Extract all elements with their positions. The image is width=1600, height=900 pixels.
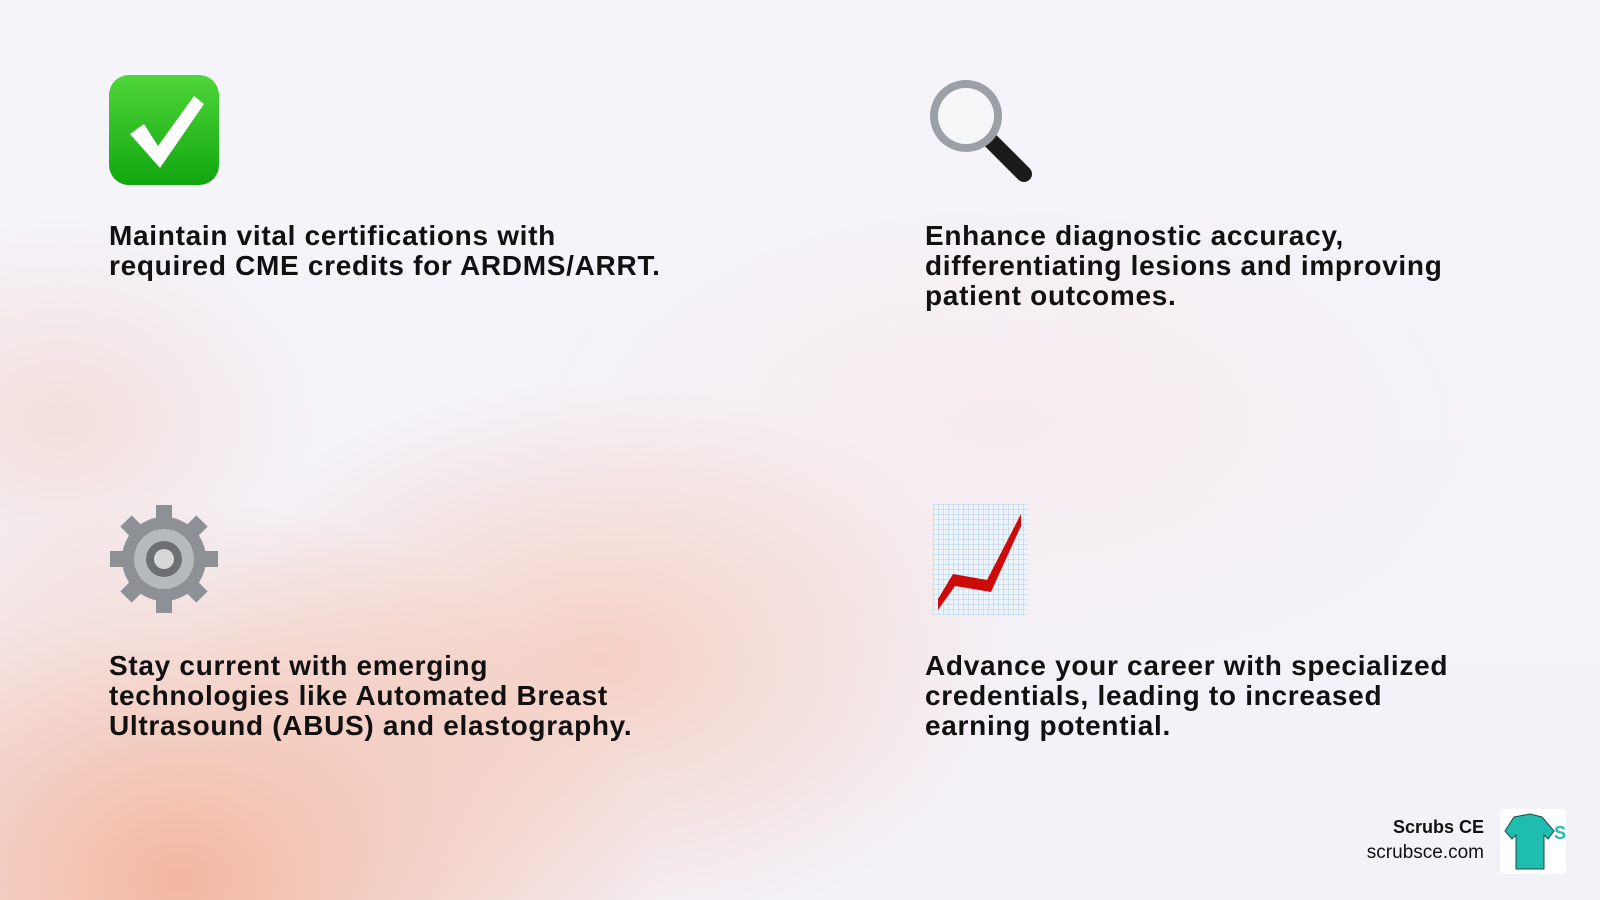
- text: technologies: Ultrasound (ABUS) and elastography.: [109, 710, 632, 741]
- text: certifications: required CME credits for ARDMS/ARRT.: [109, 250, 661, 281]
- text: diagnostic accuracy: differentiating lesions and improving: [925, 250, 1442, 281]
- text: technologies: Stay current with emerging: [109, 650, 488, 681]
- text: diagnostic accuracy: patient outcomes.: [925, 280, 1176, 311]
- text: certifications: Maintain vital certifications with: [109, 220, 556, 251]
- text: career: [925, 650, 1448, 741]
- icon: green checkmark: [109, 75, 219, 185]
- icon: gear: [110, 505, 218, 613]
- text: certifications: [109, 220, 661, 281]
- text: technologies: [109, 650, 632, 741]
- icon: chart increasing: [933, 504, 1028, 615]
- text: diagnostic accuracy: Enhance diagnostic accuracy,: [925, 220, 1344, 251]
- text: diagnostic accuracy: [925, 220, 1442, 311]
- text: technologies: technologies like Automated Breast: [109, 680, 608, 711]
- text: career: earning potential.: [925, 710, 1171, 741]
- logo: [1500, 809, 1566, 874]
- text: career: Advance your career with specialized: [925, 650, 1448, 681]
- brand: Scrubs CE: Scrubs CE: [1393, 817, 1484, 837]
- brand: Scrubs CE: [1367, 817, 1484, 863]
- icon: magnifying glass: [930, 80, 1032, 182]
- text: career: credentials, leading to increased: [925, 680, 1382, 711]
- brand: Scrubs CE: scrubsce.com: [1367, 842, 1484, 863]
- logo: S: [1554, 823, 1566, 843]
